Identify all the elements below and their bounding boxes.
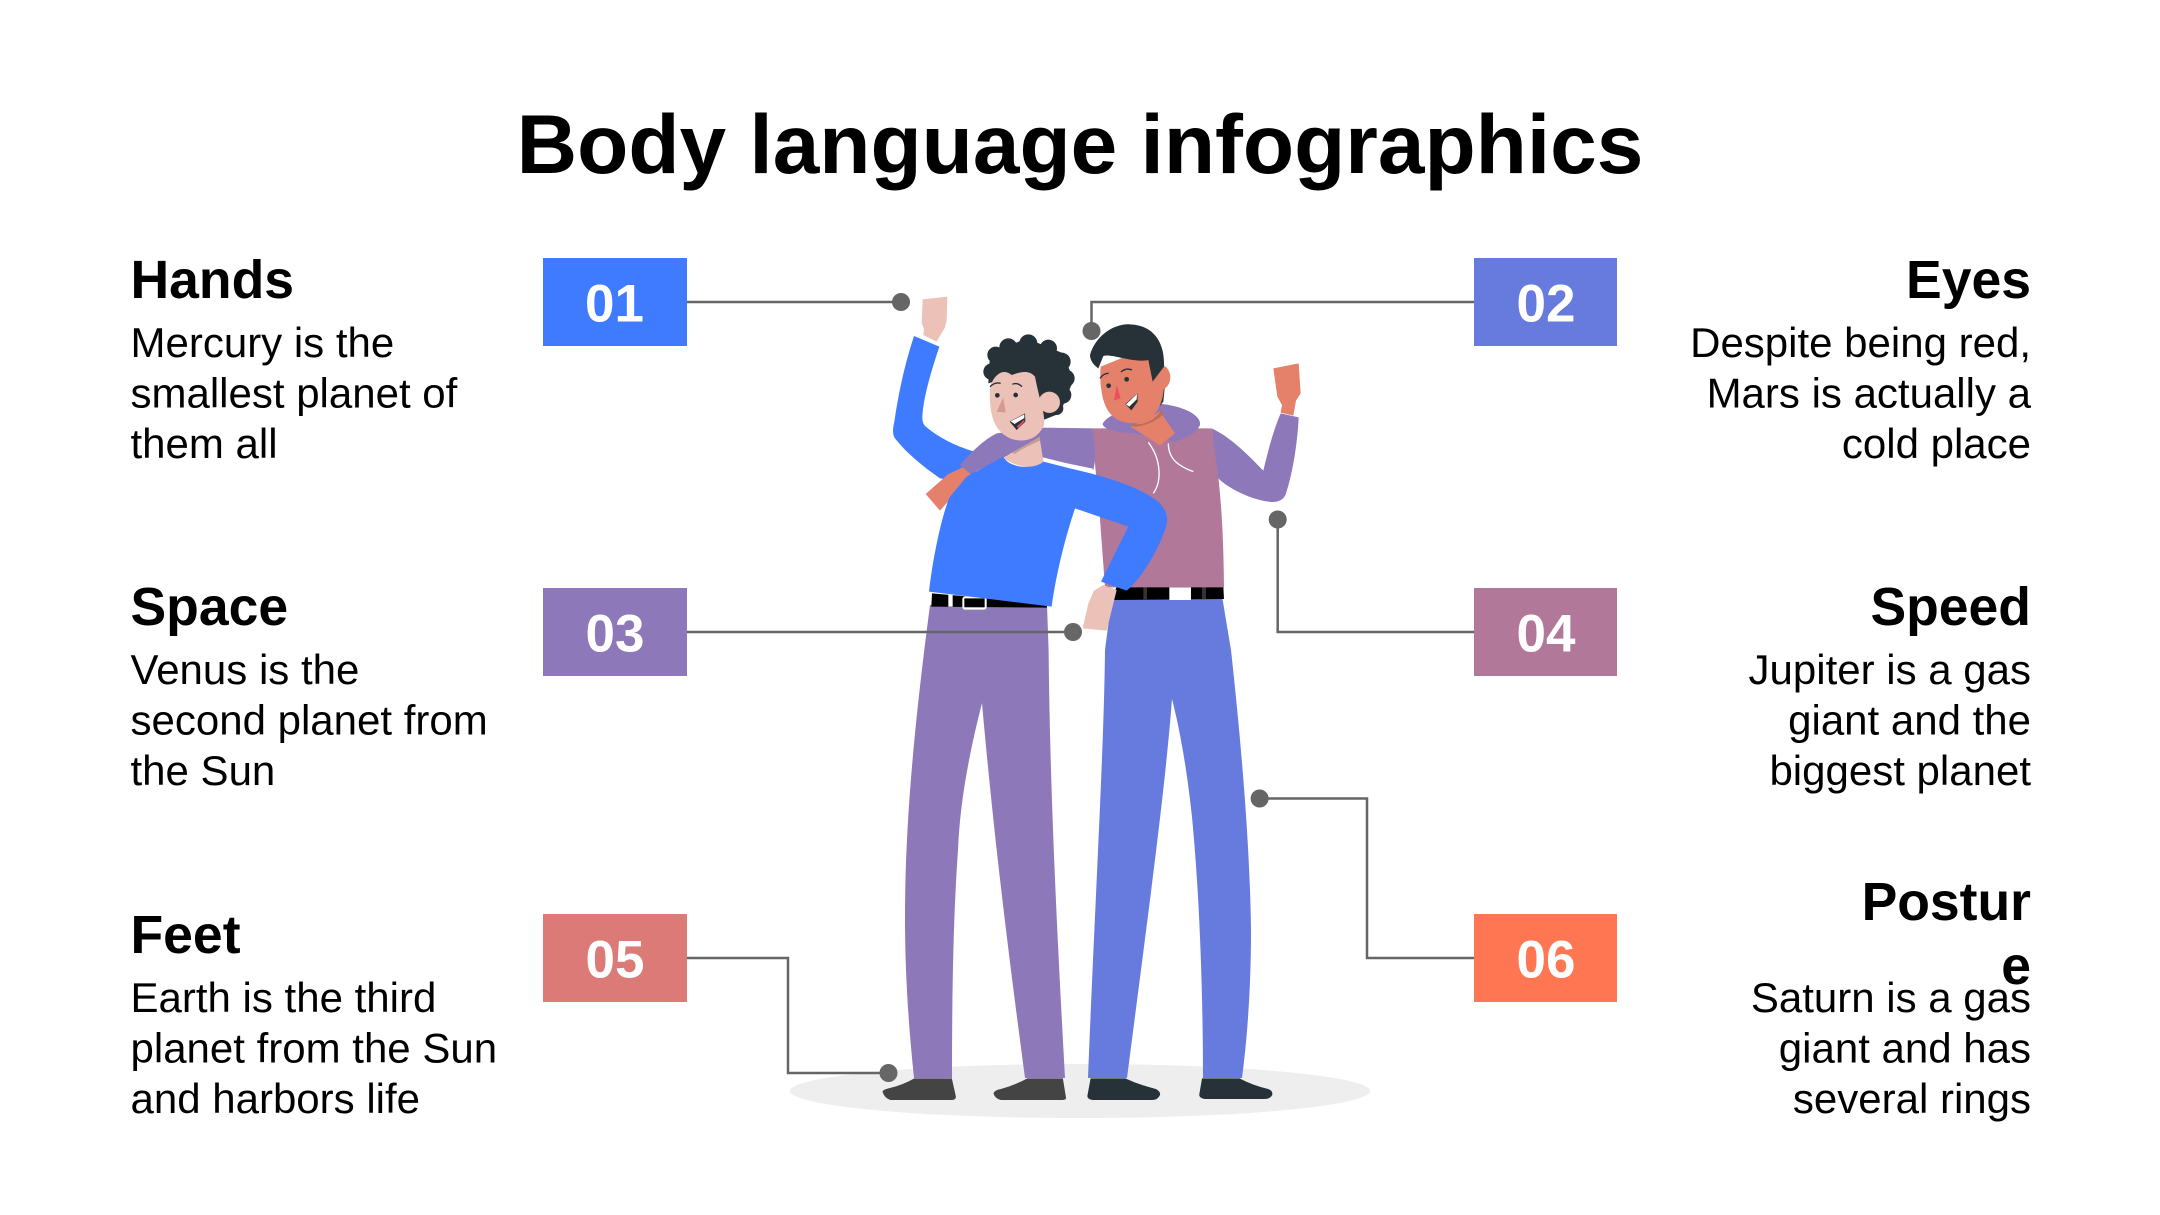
number box 06: 06 — [1517, 930, 1575, 990]
white seam — [1044, 459, 1093, 469]
left man hand on hip — [1083, 585, 1117, 631]
text block: Speed: giant and the — [1788, 696, 2031, 744]
number box 02: 02 — [1517, 274, 1575, 334]
number box 01: 01 — [585, 274, 644, 334]
left man hair — [983, 334, 1075, 420]
text block: Space: Space — [130, 578, 288, 637]
left man neck — [1003, 440, 1044, 467]
text block: Hands: smallest planet of — [130, 370, 458, 416]
connector 03 — [686, 623, 1082, 641]
left man raised hand — [922, 297, 947, 342]
connector 05 — [686, 958, 898, 1082]
right man torso — [1092, 428, 1224, 587]
left man head — [990, 372, 1044, 441]
shoes — [882, 1078, 1272, 1100]
illustration: two friends — [790, 297, 1370, 1118]
text block: Eyes: Despite being red, — [1690, 319, 2031, 366]
text block: Hands: Mercury is the — [130, 319, 394, 366]
text block: Space: the Sun — [130, 747, 275, 794]
number box 02 — [1474, 258, 1617, 346]
hoodie strings — [1148, 442, 1193, 493]
right man right hand — [1273, 363, 1301, 416]
text block: Posture: giant and has — [1779, 1024, 2031, 1072]
text block: Feet: planet from the Sun — [130, 1024, 497, 1072]
text block: Hands: Hands — [130, 251, 294, 310]
text block: Feet: Feet — [130, 906, 241, 965]
left man belt — [931, 593, 1047, 609]
text block: Posture: several rings — [1793, 1075, 2031, 1122]
right man trousers — [1088, 596, 1251, 1078]
upper bodies — [893, 297, 1301, 631]
legs and shoes — [882, 596, 1272, 1100]
left man raised arm — [893, 336, 980, 483]
text block: Speed: Speed — [1870, 578, 2031, 637]
number box 05 — [543, 914, 687, 1002]
text block: Eyes: Mars is actually a — [1707, 370, 2032, 416]
text block: Eyes: Eyes — [1906, 251, 2031, 310]
left man face — [990, 383, 1025, 430]
title: Body language infographics — [517, 97, 1643, 191]
right man face — [1100, 369, 1138, 410]
text block: Speed — [1749, 578, 2031, 794]
text block: Speed: Jupiter is a gas — [1749, 646, 2031, 693]
text block: Hands — [130, 251, 458, 467]
text block: Feet: Earth is the third — [130, 974, 436, 1021]
number box 03: 03 — [586, 604, 644, 664]
left man trousers — [905, 605, 1065, 1078]
text block: Space — [130, 578, 488, 794]
left man ear — [1039, 392, 1060, 413]
hair back — [1155, 383, 1165, 410]
connector 04 — [1269, 510, 1474, 632]
text block: Eyes: cold place — [1842, 420, 2031, 467]
text block: Feet: and harbors life — [130, 1075, 420, 1122]
text block: Posture: e — [2001, 937, 2031, 996]
ground shadow — [790, 1064, 1370, 1118]
hood — [1103, 404, 1200, 442]
text block: Posture — [1751, 873, 2031, 1122]
right man belt — [1112, 587, 1224, 600]
text block: Posture: Saturn is a gas — [1751, 974, 2031, 1021]
text block: Space: Venus is the — [130, 646, 359, 693]
connector 06 — [1251, 790, 1474, 958]
number box 05: 05 — [586, 930, 644, 990]
right man head — [1100, 353, 1164, 423]
text block: Hands: them all — [130, 420, 278, 467]
connector 01 — [686, 293, 910, 311]
number box 06 — [1474, 914, 1617, 1002]
number box 04 — [1474, 588, 1617, 676]
number box 04: 04 — [1517, 604, 1576, 664]
text block: Speed: biggest planet — [1769, 747, 2031, 794]
text block: Feet — [130, 906, 497, 1122]
right man right arm — [1212, 413, 1299, 502]
text block: Posture: Postur — [1862, 873, 2031, 932]
left man torso and hip arm — [929, 457, 1167, 607]
connector 02 — [1082, 302, 1474, 340]
text block: Eyes — [1690, 251, 2032, 467]
right man ear — [1151, 365, 1170, 390]
right man hair — [1090, 324, 1164, 382]
right man hand on shoulder — [926, 467, 971, 511]
text block: Space: second planet from — [130, 696, 488, 744]
number box 03 — [543, 588, 687, 676]
number box 01 — [543, 258, 687, 346]
right man neck — [1131, 412, 1175, 445]
right man arm over shoulder — [960, 428, 1095, 474]
